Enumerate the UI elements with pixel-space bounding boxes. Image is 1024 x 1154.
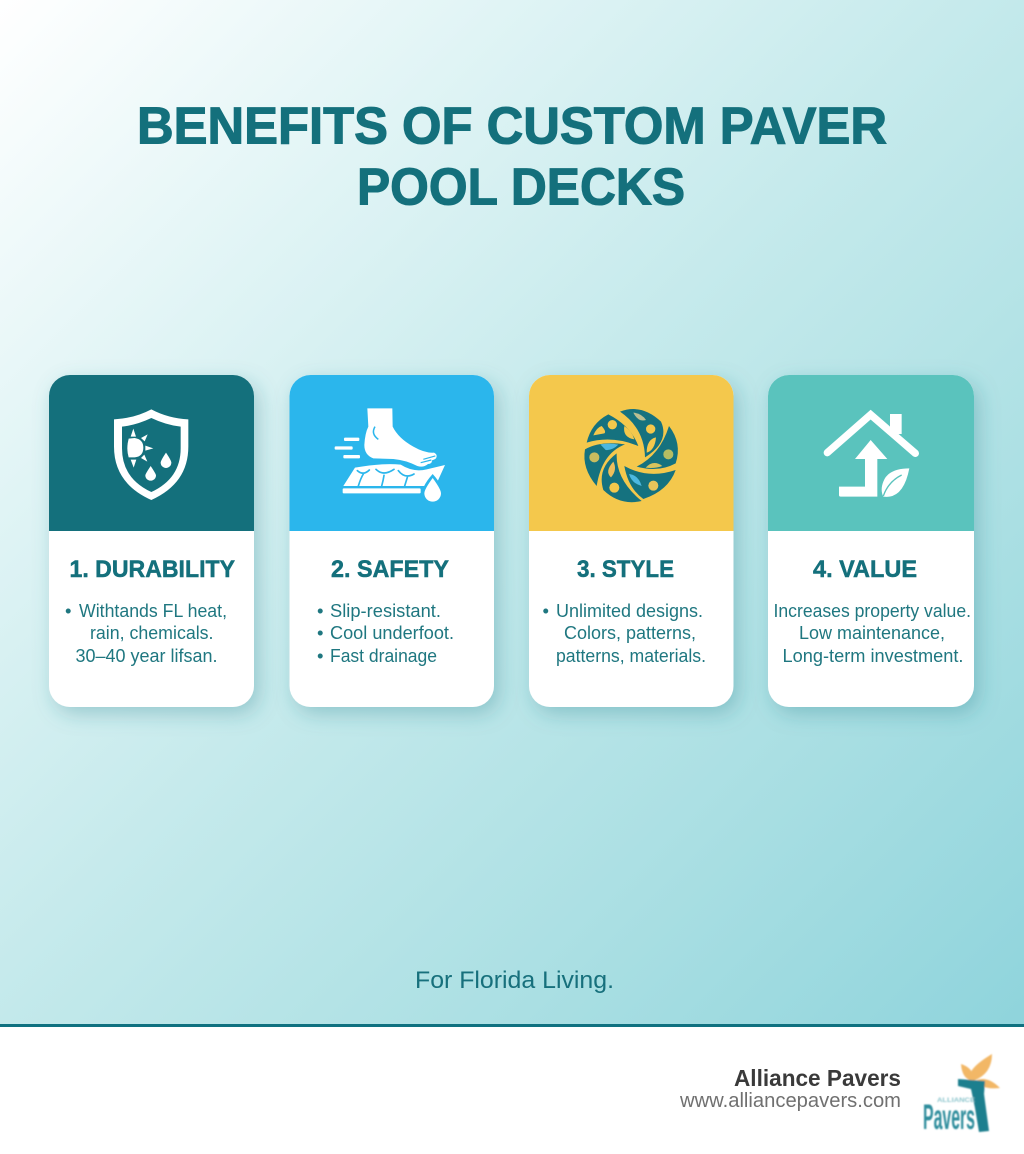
heading: style: 3. STYLE [577,556,674,583]
text: value points [774,600,971,666]
text: durability bullets: 30–40 year lifsan. [76,645,218,666]
panel: safety card [290,375,494,707]
text: safety bullets: Fast drainage [330,645,437,666]
title: BENEFITS OF CUSTOM PAVER [137,98,887,156]
text: style bullets: Unlimited designs. [556,600,703,621]
text: durability bullets: rain, chemicals. [90,622,214,643]
text: safety bullets: Slip-resistant. [330,600,441,621]
panel: value card [768,375,974,707]
text: style bullets [542,600,706,666]
text: durability bullets: Withtands FL heat, [79,600,227,621]
text: safety bullets: • [317,600,323,621]
logo: Alliance Pavers: ALLIANCE [937,1097,976,1104]
panel: durability card [49,375,254,707]
text: value points: Low maintenance, [799,622,945,643]
card header: safety [290,375,494,531]
text: durability bullets: • [65,600,71,621]
icon: shield with sun and rain [114,409,188,500]
text: value points: Long-term investment. [782,645,964,666]
text: value points: Increases property value. [774,600,971,621]
text: safety bullets [317,600,454,666]
logo: Alliance Pavers [923,1054,1000,1137]
text: safety bullets: • [317,622,323,643]
card header: durability [49,375,254,531]
tagline: For Florida Living. [415,967,614,994]
title: POOL DECKS [357,158,685,216]
website: www.alliancepavers.com [679,1090,901,1112]
text: style bullets: patterns, materials. [556,645,706,666]
footer band [0,1024,1024,1154]
icon: foot on wet paver [335,408,445,507]
company name: Alliance Pavers [734,1065,901,1091]
heading: durability: 1. DURABILITY [70,556,235,583]
panel: style card [529,375,734,707]
title [137,98,887,216]
text: style bullets: Colors, patterns, [564,622,696,643]
card header: style [529,375,734,531]
text: safety bullets: • [317,645,323,666]
text: safety bullets: Cool underfoot. [330,622,454,643]
text: durability bullets [65,600,227,666]
heading: value: 4. VALUE [813,556,917,583]
text: style bullets: • [542,600,549,621]
icon: paver mosaic swirl [584,409,678,502]
card header: value [768,375,974,531]
heading: safety: 2. SAFETY [331,556,449,583]
icon: house with arrow and leaf [827,414,915,497]
